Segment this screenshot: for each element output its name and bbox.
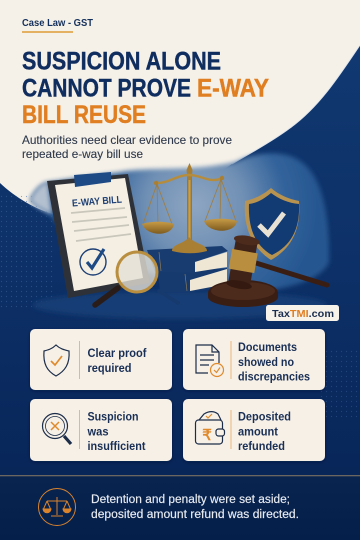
text: deposited amount refunded: refunded xyxy=(238,439,285,453)
title xyxy=(22,48,269,129)
text: documents showed no discrepancies: discrepancies xyxy=(238,370,310,384)
footer band xyxy=(0,475,360,540)
icon: wallet with rupee: ₹ xyxy=(202,427,212,444)
text: deposited amount refunded: amount xyxy=(238,424,278,438)
illustration: clipboard xyxy=(47,172,150,298)
card: clear proof required xyxy=(30,329,172,390)
illustration: books xyxy=(147,246,228,292)
card: deposited amount refunded xyxy=(183,399,325,461)
title: E-WAY xyxy=(197,74,269,102)
brush backdrop xyxy=(30,153,329,319)
title: BILL REUSE xyxy=(22,101,146,129)
badge: TaxTMI.com xyxy=(266,305,339,321)
tag: case law: Case Law - GST xyxy=(22,18,93,29)
badge: TaxTMI.com: TaxTMI.com xyxy=(272,309,334,320)
text: clear proof required: required xyxy=(88,361,132,375)
text: deposited amount refunded: Deposited xyxy=(238,410,291,424)
subtitle: Authorities need clear evidence to prove xyxy=(22,133,232,147)
footer text xyxy=(91,494,299,521)
footer text: deposited amount refund was directed. xyxy=(91,509,299,521)
text: deposited amount refunded xyxy=(238,410,291,453)
text: suspicion was insufficient: was xyxy=(87,424,109,438)
illustration: shield xyxy=(245,188,299,260)
card: suspicion was insufficient xyxy=(30,399,172,461)
card: documents showed no discrepancies xyxy=(183,329,325,390)
text: clear proof required: Clear proof xyxy=(88,346,147,360)
icon: document check xyxy=(196,345,224,376)
illustration: gavel xyxy=(208,234,327,307)
text: documents showed no discrepancies xyxy=(238,340,310,384)
text: documents showed no discrepancies: Documents xyxy=(238,340,297,354)
icon: magnifier cross xyxy=(42,414,71,444)
text: suspicion was insufficient xyxy=(87,410,146,453)
text: clear proof required xyxy=(88,346,147,375)
text: documents showed no discrepancies: showed no xyxy=(238,355,294,369)
text: suspicion was insufficient: Suspicion xyxy=(88,410,138,424)
illustration: clipboard: E-WAY BILL xyxy=(72,195,122,209)
subtitle xyxy=(22,133,232,161)
icon: shield check xyxy=(44,345,69,376)
icon: scales in circle xyxy=(38,488,76,526)
illustration: scales xyxy=(142,163,237,253)
title: CANNOT PROVE xyxy=(22,74,191,102)
illustration: magnifier xyxy=(95,252,178,305)
subtitle: repeated e-way bill use xyxy=(22,147,143,161)
icon: wallet with rupee xyxy=(196,412,224,444)
text: suspicion was insufficient: insufficient xyxy=(88,439,146,453)
title: SUSPICION ALONE xyxy=(22,48,221,76)
footer text: Detention and penalty were set aside; xyxy=(91,494,290,506)
